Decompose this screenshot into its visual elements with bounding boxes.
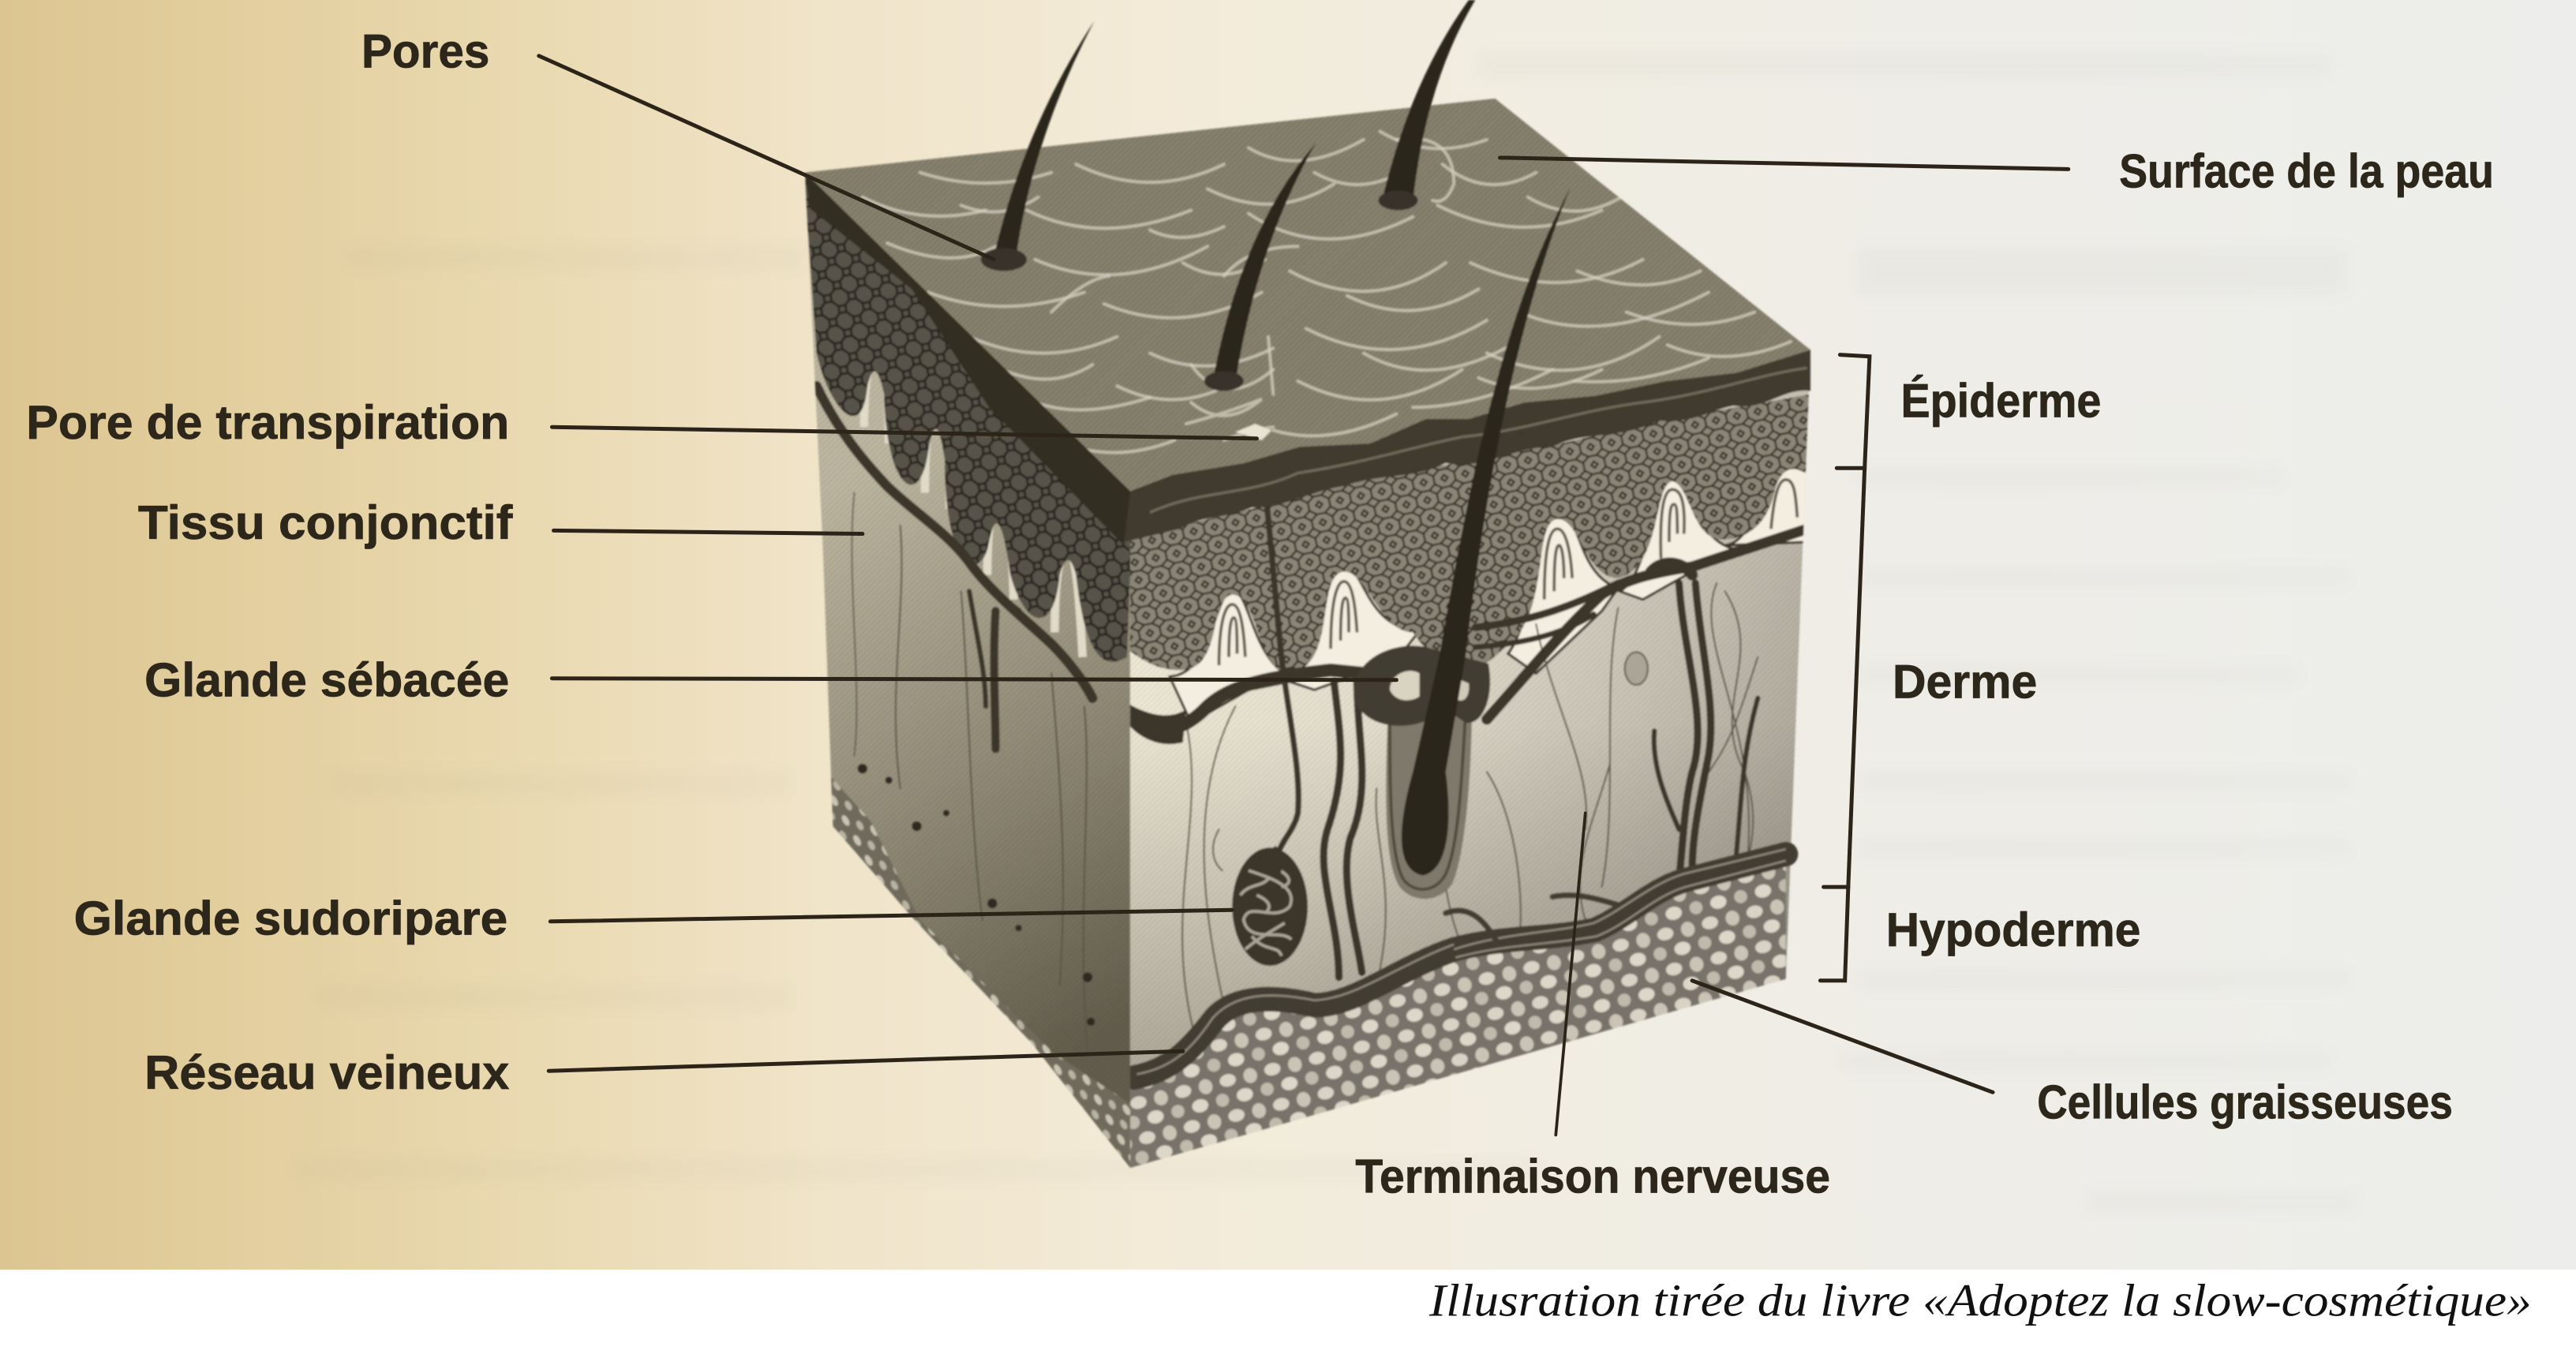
top face: skin surface [805, 99, 1810, 491]
leader line: sweat pore [552, 427, 1256, 439]
hair follicle with root [1386, 698, 1472, 899]
hypodermis fat cells, front [1130, 862, 1786, 1168]
vessels, left [817, 386, 1092, 749]
caption band [0, 1270, 2576, 1354]
label: pores: Pores [361, 24, 489, 77]
stratum corneum dark band, left [805, 173, 1130, 545]
label: epidermis: Épiderme [1900, 374, 2101, 428]
epidermis cell layer, left [803, 164, 1133, 662]
label: connective tissue: Tissu conjonctif [138, 496, 513, 549]
label: sebaceous gland: Glande sébacée [144, 653, 509, 707]
pores dots, left [858, 764, 1095, 1026]
vessels, front [1129, 505, 1805, 982]
label: dermis: Derme [1893, 655, 2037, 709]
hypodermis, left [829, 776, 1130, 1168]
epidermis cell layer, front [1124, 395, 1810, 677]
bracket: hypodermis [1820, 887, 1848, 981]
front face: dermis [1129, 390, 1810, 1066]
label: skin surface: Surface de la peau [2119, 144, 2494, 197]
leader line: skin surface [1500, 158, 2069, 169]
thin nerve fibres, front [1182, 583, 1758, 1051]
label: sweat pore: Pore de transpiration [26, 395, 509, 449]
leader line: sweat gland [550, 910, 1232, 922]
vertical fibres, left [852, 492, 1088, 1051]
leader line: nerve ending [1556, 813, 1586, 1135]
venous network [1133, 849, 1786, 1078]
leader line: fat cells [1692, 981, 1993, 1092]
label: fat cells: Cellules graisseuses [2037, 1075, 2453, 1129]
hair 4 with shaft and bulb [1402, 187, 1571, 876]
label: hypodermis: Hypoderme [1886, 903, 2140, 956]
hair 3 [1204, 143, 1316, 391]
skin relief arcs [863, 132, 1791, 453]
papillae white bases [1170, 462, 1810, 723]
white connective loops [864, 358, 1083, 657]
source caption: Illusration tirée du livre «Adoptez la slow-cosmétique» [1428, 1274, 2532, 1326]
label: nerve ending: Terminaison nerveuse [1355, 1149, 1830, 1203]
label: sweat gland: Glande sudoripare [74, 891, 507, 944]
leader line: connective tissue [554, 530, 863, 534]
sweat pore opening [1235, 424, 1271, 440]
stratum corneum dark band, front [1124, 350, 1810, 542]
hair 2 [1378, 0, 1475, 210]
left face [803, 164, 1133, 1168]
leader line: pores [539, 56, 994, 260]
hair 1 [981, 21, 1094, 271]
bracket: dermis [1824, 468, 1865, 887]
skin cube illustration [803, 0, 1810, 1168]
leader line: sebaceous gland [552, 679, 1396, 680]
bracket: epidermis [1837, 355, 1870, 468]
papillae inner loops [1219, 480, 1797, 665]
sebaceous gland [1354, 645, 1490, 726]
leader line: venous network [549, 1051, 1183, 1071]
label: venous network: Réseau veineux [144, 1045, 510, 1099]
sweat gland [1232, 847, 1308, 966]
